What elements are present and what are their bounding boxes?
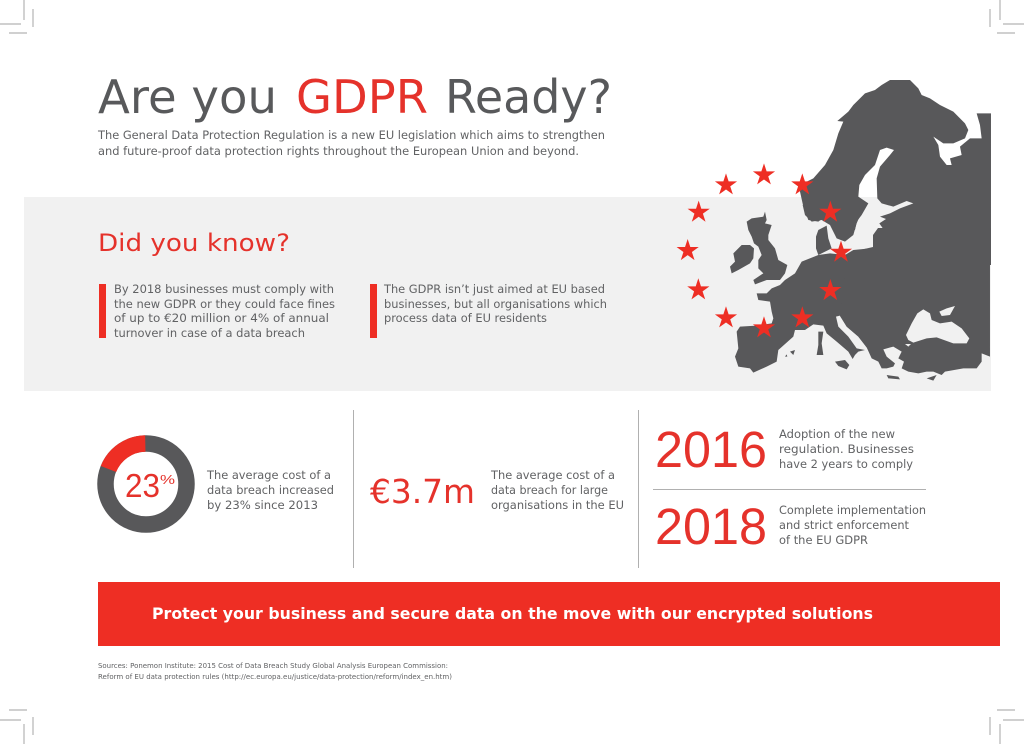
call to action banner <box>98 582 1000 646</box>
stat text: average cost: organisations in the EU <box>491 498 624 512</box>
intro text <box>97 128 605 158</box>
heading: did you know: Did you know? <box>98 229 290 257</box>
timeline: 2016: regulation. Businesses <box>779 442 914 456</box>
title <box>98 70 612 124</box>
map: continent <box>730 80 991 381</box>
call to action banner: Protect your business and secure data on the move with our encrypted solutions <box>152 604 873 623</box>
donut chart: 23%: 23 <box>125 467 160 504</box>
fact text: of up to €20 million or 4% of annual <box>114 311 329 325</box>
stat text: average cost <box>490 468 624 512</box>
fact text: By 2018 businesses must comply with <box>114 282 334 296</box>
intro text: The General Data Protection Regulation is a new EU legislation which aims to strengthen <box>97 128 605 142</box>
stat text: average cost: The average cost of a <box>490 468 615 482</box>
stat text: cost increase: The average cost of a <box>206 468 331 482</box>
title: GDPR <box>296 70 428 124</box>
fact text: turnover in case of a data breach <box>114 326 305 340</box>
red bar marker <box>370 284 377 338</box>
fact text: the new GDPR or they could face fines <box>114 297 335 311</box>
timeline: 2016: 2016 <box>655 421 767 478</box>
stat text: average cost: data breach for large <box>491 483 608 497</box>
timeline: 2016: have 2 years to comply <box>779 457 913 471</box>
timeline: 2016 <box>655 421 914 478</box>
title: Ready? <box>445 70 612 124</box>
map: twelve stars <box>677 163 852 337</box>
donut chart: 23%: % <box>160 472 176 487</box>
fact text <box>383 282 607 325</box>
timeline: 2018: of the EU GDPR <box>779 533 868 547</box>
timeline: 2018: and strict enforcement <box>779 518 909 532</box>
sources <box>98 662 452 681</box>
timeline: 2018 <box>655 498 926 555</box>
donut chart: 23% <box>106 444 186 524</box>
fact: fines <box>99 282 335 340</box>
timeline: 2018: 2018 <box>655 498 767 555</box>
red bar marker <box>99 284 106 338</box>
stat text: cost increase <box>206 468 334 512</box>
map: black sea and azov <box>905 306 969 347</box>
sources: Sources: Ponemon Institute: 2015 Cost of Data Breach Study Global Analysis European Commission: <box>98 662 448 670</box>
timeline: 2018: Complete implementation <box>779 503 926 517</box>
intro text: and future-proof data protection rights throughout the European Union and beyond. <box>98 144 579 158</box>
timeline: 2016: Adoption of the new <box>779 427 895 441</box>
stat text: cost increase: data breach increased <box>207 483 334 497</box>
fact: scope <box>370 282 607 338</box>
stat: 3.7m: €3.7m <box>370 472 475 511</box>
sources: Reform of EU data protection rules (http://ec.europa.eu/justice/data-protection/reform/index_en.htm) <box>98 673 452 681</box>
title: Are you <box>98 70 277 124</box>
stat text: cost increase: by 23% since 2013 <box>207 498 318 512</box>
fact text: The GDPR isn’t just aimed at EU based <box>383 282 605 296</box>
map of Europe with EU stars <box>677 80 991 381</box>
panel: did you know background band <box>24 197 991 391</box>
fact text: process data of EU residents <box>384 311 547 325</box>
fact text <box>114 282 335 340</box>
fact text: businesses, but all organisations which <box>384 297 607 311</box>
